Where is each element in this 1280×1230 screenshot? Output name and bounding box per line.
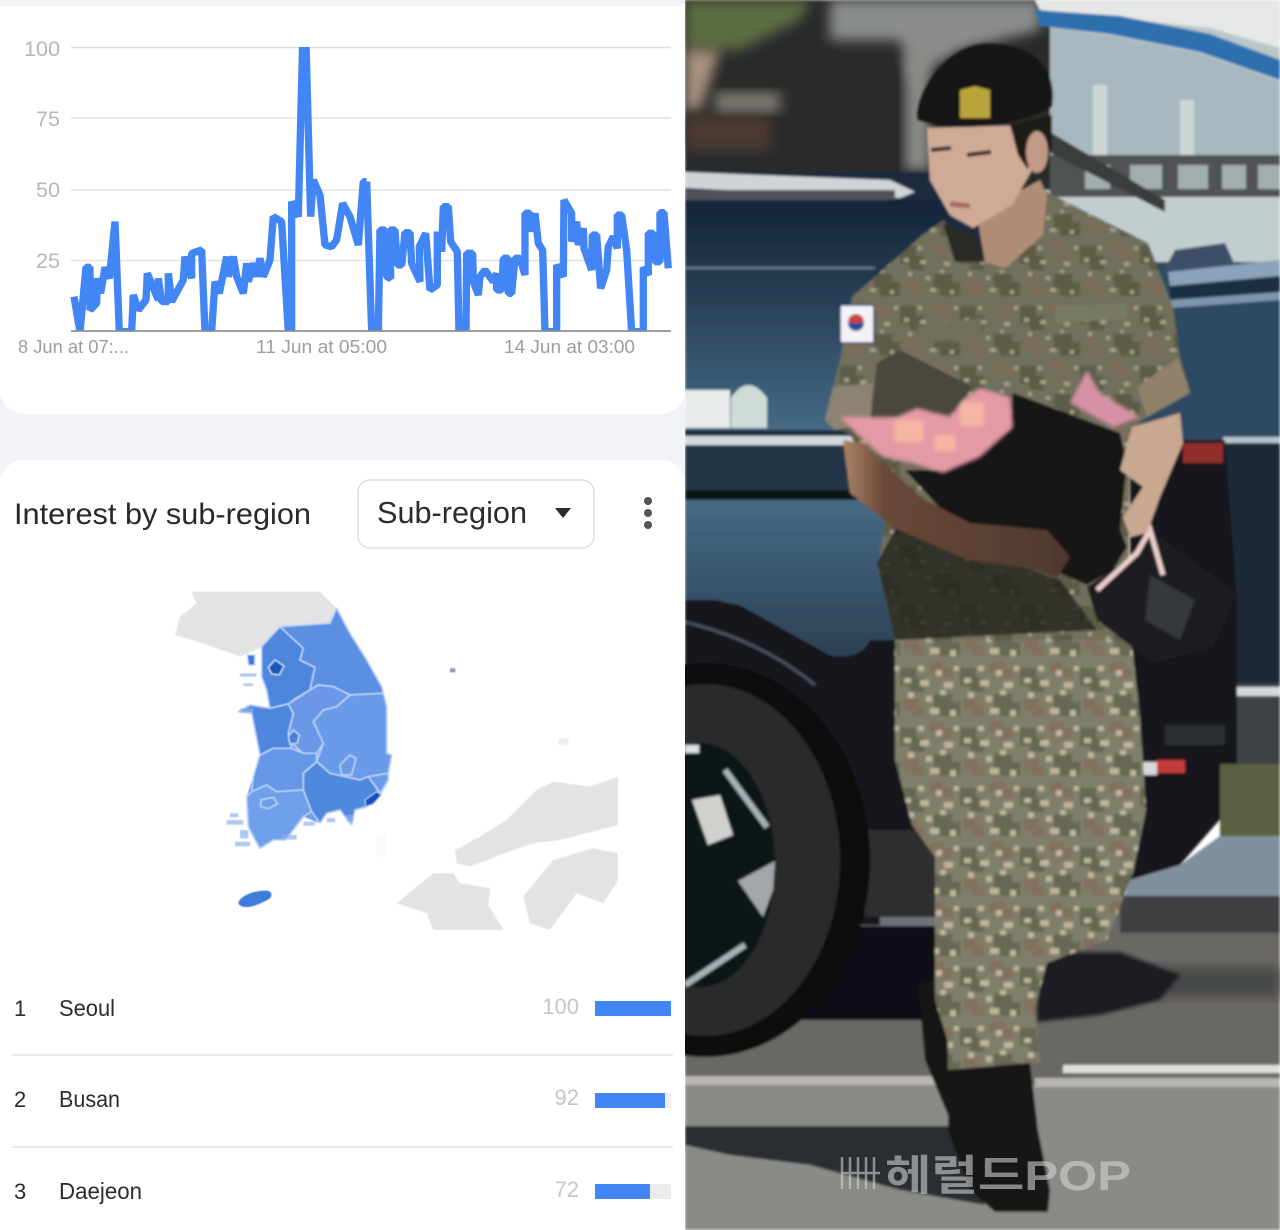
hair xyxy=(1010,115,1052,170)
front wheel xyxy=(685,663,870,1058)
provinces xyxy=(238,608,392,848)
bag handles xyxy=(1097,530,1163,590)
bouquet wrap xyxy=(905,393,1127,585)
row: Daejeon xyxy=(14,1177,671,1204)
sleeve dark fold xyxy=(870,350,973,423)
right car xyxy=(1125,243,1280,896)
torso jacket xyxy=(825,190,1190,640)
trousers xyxy=(895,630,1146,1070)
y axis labels xyxy=(24,36,60,273)
jeju xyxy=(238,891,271,907)
flowers xyxy=(840,370,1140,473)
background trees and building xyxy=(685,0,1280,300)
row: Busan: 92 xyxy=(555,1085,579,1110)
car behind soldier xyxy=(685,172,985,1020)
row: Daejeon: 72 xyxy=(555,1177,579,1202)
line chart xyxy=(71,43,671,332)
eyes and mouth xyxy=(931,148,991,155)
x axis labels: 14 Jun at 03:00 xyxy=(504,337,635,357)
panel: interest over time xyxy=(0,6,685,414)
beret xyxy=(917,43,1053,127)
soldier figure xyxy=(825,43,1237,1212)
face xyxy=(927,125,1032,228)
cities xyxy=(268,660,284,675)
car lower body xyxy=(685,600,935,925)
grey neighbours xyxy=(175,592,618,930)
row: Seoul xyxy=(14,994,671,1021)
row: Busan xyxy=(14,1085,671,1112)
icon: more menu xyxy=(644,497,652,529)
silhouette xyxy=(246,744,390,823)
flag patch xyxy=(840,305,874,343)
dropdown xyxy=(358,480,594,548)
collar shadow xyxy=(943,223,985,262)
x axis labels: 11 Jun at 05:00 xyxy=(256,337,387,357)
y axis labels: 25 xyxy=(36,248,60,273)
photo: soldier holding bouquet xyxy=(685,0,1280,1230)
watermark: 헤럴드POP xyxy=(885,1152,1131,1199)
y axis labels: 100 xyxy=(24,36,60,61)
ear xyxy=(1026,131,1048,173)
map: South Korea xyxy=(175,592,618,930)
row: Busan: 2 xyxy=(14,1087,26,1112)
neck xyxy=(977,180,1047,268)
row: Seoul: 100 xyxy=(542,994,579,1019)
y axis labels: 75 xyxy=(36,106,60,131)
dropdown: Sub-region xyxy=(377,495,527,530)
row: Busan: Busan xyxy=(59,1086,120,1112)
boots xyxy=(948,1063,1050,1212)
dashboard items xyxy=(685,390,730,428)
left forearm xyxy=(843,440,1070,578)
rear leg shadow xyxy=(918,980,950,1120)
x axis labels xyxy=(18,337,635,357)
road surface xyxy=(685,895,1280,1230)
right forearm xyxy=(1120,413,1183,537)
heading: Interest by sub-region xyxy=(14,498,311,531)
name tapes xyxy=(917,318,983,344)
bag xyxy=(1086,559,1153,647)
y axis labels: 50 xyxy=(36,177,60,202)
beret badge xyxy=(960,86,990,118)
lower jacket shadow xyxy=(877,520,1097,640)
left background band xyxy=(0,0,685,1230)
x axis labels: 8 Jun at 07:... xyxy=(18,337,129,357)
rolled sleeves xyxy=(825,383,873,430)
row: Daejeon: Daejeon xyxy=(59,1178,142,1204)
panel: interest by sub-region xyxy=(0,460,685,1230)
row: Seoul: Seoul xyxy=(59,995,115,1021)
ranked list xyxy=(12,994,673,1204)
row: Daejeon: 3 xyxy=(14,1179,26,1204)
row: Seoul: 1 xyxy=(14,996,26,1021)
coastal islands xyxy=(227,673,353,846)
